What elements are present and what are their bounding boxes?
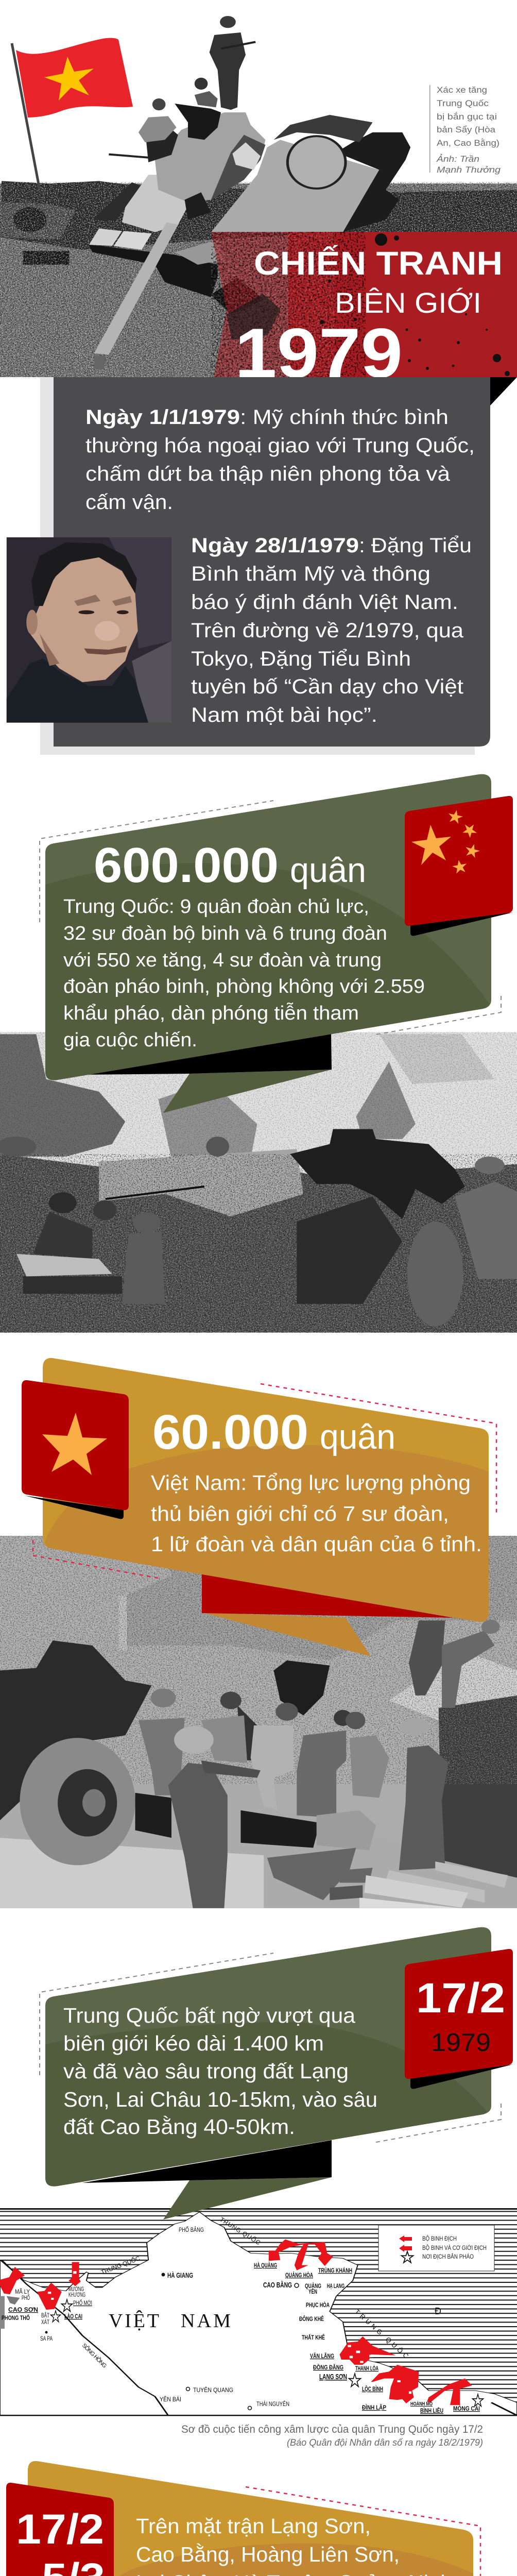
sub: country labels on map: TRUNG QUỐC	[353, 2308, 410, 2360]
sub: headline figure: 60.000	[152, 1405, 308, 1460]
sub: place names: HÀ QUẢNG	[254, 2261, 277, 2269]
sub: ribbon tail	[202, 1574, 453, 1656]
panel: timeline 1979	[40, 377, 517, 755]
sub: body text	[151, 1471, 482, 1556]
photo caption: Trung Quốc	[437, 98, 489, 108]
sub: paragraph January 28: báo ý định đánh Việt Nam.	[191, 591, 458, 614]
sub: place names: PHỤC HÒA	[306, 2301, 330, 2309]
sub: body text: khẩu pháo, dàn phóng tiễn tham	[63, 1002, 359, 1024]
icon: Vietnam flag square	[22, 1380, 129, 1519]
sub: place names: PHONG THỔ	[2, 2314, 30, 2321]
sub: gun shield	[290, 1129, 465, 1219]
sub: paragraph January 1: Ngày 1/1/1979	[85, 406, 240, 429]
sub: place names: PHỐ	[22, 2294, 30, 2301]
sub: headline figure	[152, 1405, 395, 1460]
title: 1979	[235, 314, 403, 392]
sub: place names: YÊN BÁI	[160, 2395, 181, 2403]
sub: place names: LỘC BÌNH	[362, 2385, 383, 2393]
sub: country labels on map	[81, 2215, 441, 2369]
sub: country labels on map: SÔNG HỒNG	[81, 2342, 108, 2369]
photo caption: An, Cao Bằng)	[437, 138, 499, 148]
sub: place names: THẤT KHÊ	[302, 2333, 325, 2341]
sub: legend: BỘ BINH VÀ CƠ GIỚI ĐỊCH	[422, 2244, 487, 2251]
sub: paragraph January 28: Bình thăm Mỹ và thông	[191, 563, 430, 585]
title red grunge panel	[211, 232, 517, 377]
sub: headline figure: quân	[290, 851, 366, 890]
sub: paragraph January 28: Ngày 28/1/1979	[191, 534, 359, 557]
map caption: Sơ đồ cuộc tiến công xâm lược của quân Trung Quốc ngày 17/2	[181, 2424, 483, 2435]
sub: body text: biên giới kéo dài 1.400 km	[63, 2031, 324, 2055]
sub: place names: THÁI NGUYÊN	[256, 2400, 289, 2408]
sub: green body	[45, 1927, 491, 2187]
sub: place names: THANH LÒA	[355, 2364, 378, 2372]
sub: tank gun barrel	[94, 222, 178, 369]
panel: 17/2 to 5/3 victory	[17, 2461, 480, 2576]
sub: gold body	[28, 2461, 473, 2576]
sub: legend: BỘ BINH ĐỊCH	[422, 2234, 457, 2242]
sub: paragraph January 1: cấm vận.	[85, 491, 173, 514]
sub: body text: Trung Quốc: 9 quân đoàn chủ lực,	[63, 896, 369, 918]
icon: Vietnam flag on pole	[12, 38, 133, 190]
icon: China flag	[405, 796, 513, 936]
sub: body text: Trung Quốc bất ngờ vượt qua	[63, 2004, 355, 2027]
sub: headline figure: quân	[320, 1417, 395, 1456]
map caption: (Báo Quân đội Nhân dân số ra ngày 18/2/1979)	[287, 2437, 483, 2448]
sub: paragraph January 28	[191, 534, 472, 726]
sub: map frame lines	[0, 2208, 517, 2416]
sub: soldiers	[0, 1137, 517, 1304]
sub: body text: Trên mặt trận Lạng Sơn,	[136, 2514, 371, 2538]
sub: paragraph January 1: chấm dứt ba thập niên phong tỏa và	[85, 463, 451, 485]
sub: dashed outline	[40, 1953, 501, 2142]
date tag: 17/2 1979: 1979	[431, 2029, 491, 2057]
sub: tank hull	[89, 115, 410, 315]
photo caption: Mạnh Thưởng	[437, 165, 501, 175]
sub: dark panel body	[54, 377, 490, 747]
sub: body text: đất Cao Bằng 40-50km.	[63, 2115, 295, 2139]
sub: place names: HẠ LANG	[327, 2282, 344, 2290]
sub: ribbon tail	[82, 2140, 332, 2219]
map: invasion routes 17/2	[0, 2208, 517, 2416]
sub: place names: CAO BẰNG	[263, 2280, 292, 2290]
sub: dashed outline	[33, 1384, 496, 1578]
map caption	[181, 2424, 483, 2448]
sub: place names: MÃ LY	[15, 2288, 30, 2295]
sub: place names	[2, 2226, 480, 2414]
panel: 17/2 invasion	[40, 1927, 501, 2219]
sub: place names: ĐỒNG ĐĂNG	[313, 2363, 343, 2371]
sub: body text: với 550 xe tăng, 4 sư đoàn và trung	[63, 950, 382, 971]
sub: place names: PHỐ BẢNG	[179, 2226, 204, 2233]
panel: China 600.000 troops	[40, 774, 501, 1113]
sub: body text: và đã vào sâu trong đất Lạng	[63, 2059, 349, 2083]
sub: crew	[139, 1620, 500, 1908]
sub: place names: PHỐ MỚI	[73, 2299, 92, 2307]
sub: place names: TUYÊN QUANG	[193, 2386, 233, 2394]
date tag: 17/2 - 5/3	[6, 2483, 114, 2576]
photo caption: bản Sẩy (Hòa	[437, 125, 496, 134]
sub: headline figure: 600.000	[94, 838, 279, 893]
sub: place names: HÀ GIANG	[167, 2271, 193, 2279]
sub: dashed outline	[40, 801, 501, 1035]
sub: paragraph January 1: : Mỹ chính thức bình	[240, 406, 449, 429]
date tag: 17/2 1979: 17/2	[416, 1975, 505, 2022]
sub: place names: QUẢNG	[305, 2282, 321, 2290]
panel: Vietnam 60.000 troops	[33, 1358, 496, 1656]
sub: paragraph January 28: Nam một bài học”.	[191, 704, 377, 726]
sub: shell burst markers	[50, 2299, 483, 2406]
sub: Vietnam landmass	[0, 2212, 517, 2415]
sub: headline figure	[94, 838, 366, 893]
sub: country labels on map: NAM	[181, 2310, 231, 2332]
sub: paragraph January 28: tuyên bố “Cần dạy cho Việt	[191, 675, 463, 698]
sub: paragraph January 28: : Đặng Tiểu	[359, 534, 472, 557]
photo: Vietnamese artillery crew	[0, 1534, 517, 1908]
sub: body text: thủ biên giới chỉ có 7 sư đoàn,	[151, 1502, 449, 1526]
sub: panel shadow	[40, 377, 475, 755]
date tag: 17/2 1979	[405, 1949, 513, 2089]
photo caption: bị bắn gục tại	[437, 112, 497, 122]
sub: place names: HOÀNH MÔ	[410, 2400, 433, 2407]
sub: place names: ĐÔNG KHÊ	[299, 2315, 324, 2323]
sub: country labels on map: VIỆT	[109, 2310, 159, 2332]
sub: place names: BÌNH LIÊU	[420, 2406, 443, 2414]
sub: howitzer gun	[0, 1640, 320, 1865]
sub: country labels on map: TRUNG QUỐC	[100, 2254, 141, 2276]
sub: paragraph January 1	[85, 406, 475, 514]
sub: body text: 32 sư đoàn bộ binh và 6 trung đoàn	[63, 923, 387, 944]
title	[235, 245, 503, 392]
sub: place names: LÀO CAI	[64, 2312, 82, 2320]
sub: place names: CAO SƠN	[8, 2306, 38, 2313]
sub: body text: gia cuộc chiến.	[63, 1029, 197, 1051]
date tag: 17/2 - 5/3: 17/2	[16, 2506, 104, 2553]
sub: legend: NƠI ĐỊCH BẮN PHÁO	[422, 2252, 474, 2260]
sub: place names: KHƯƠNG	[68, 2291, 85, 2298]
sub: body text: Việt Nam: Tổng lực lượng phòng	[151, 1471, 471, 1495]
sub: corner fold	[490, 377, 517, 405]
photo caption: Xác xe tăng	[437, 85, 487, 95]
sub: paragraph January 28: Tokyo, Đặng Tiểu Bình	[191, 648, 411, 670]
sub: red attack arrows	[0, 2240, 472, 2405]
portrait: Deng Xiaoping	[7, 537, 171, 723]
sub: bunker entrance	[273, 1660, 330, 1716]
sub: green body	[45, 774, 491, 1080]
sub: country labels on map: TRUNG QUỐC	[218, 2215, 262, 2246]
photo caption	[429, 85, 501, 175]
photo: Chinese artillery crew	[0, 1032, 517, 1333]
sub: place names: ĐÌNH LẬP	[362, 2403, 386, 2411]
sub: place names: LẠNG SƠN	[319, 2372, 347, 2381]
sub: place names: MÓNG CÁI	[453, 2404, 480, 2412]
sub: shells and tarp	[267, 1810, 508, 1908]
sub: body text	[63, 896, 425, 1051]
sub: body text: Sơn, Lai Châu 10-15km, vào sâu	[63, 2088, 377, 2111]
sub: paragraph January 1: thường hóa ngoại giao với Trung Quốc,	[85, 434, 475, 457]
title: BIÊN GIỚI	[335, 286, 481, 319]
sub: country labels on map: Đ	[435, 2306, 441, 2316]
sub: body text	[136, 2514, 458, 2576]
sub: dashed outline	[17, 2487, 480, 2576]
sub: seated soldiers	[109, 78, 218, 158]
sub: place names: MƯỜNG	[68, 2285, 84, 2293]
sub: standing soldier	[210, 16, 255, 110]
sub: body text: đoàn pháo binh, phòng không với 2.559	[63, 976, 425, 997]
photo caption: Ảnh: Trần	[436, 154, 479, 164]
sub: tank turret	[145, 104, 265, 220]
sub: gold body	[43, 1358, 489, 1622]
sub: legend	[378, 2225, 494, 2271]
title: CHIẾN TRANH	[254, 245, 503, 282]
sub: place names: XÁT	[41, 2318, 49, 2326]
sub: body text: 1 lữ đoàn và dân quân của 6 tỉnh.	[151, 1532, 482, 1556]
sub: body text	[63, 2004, 377, 2139]
sub: place names: SA PA	[40, 2335, 53, 2342]
sub: ribbon tail	[82, 1033, 332, 1113]
sub: place names: TRÙNG KHÁNH	[318, 2266, 352, 2274]
sub: striped China territory	[0, 2209, 517, 2415]
sub: body text: Cao Bằng, Hoàng Liên Sơn,	[136, 2543, 400, 2566]
sub: place names: BẮT	[41, 2311, 49, 2319]
sub: paragraph January 28: Trên đường về 2/1979, qua	[191, 619, 464, 642]
sub: place names: QUẢNG HÒA	[285, 2271, 313, 2279]
sub: place names: VĂN LÃNG	[310, 2352, 334, 2360]
sub: place names: YÊN	[308, 2287, 317, 2295]
photo: destroyed tank with soldiers	[0, 16, 517, 377]
